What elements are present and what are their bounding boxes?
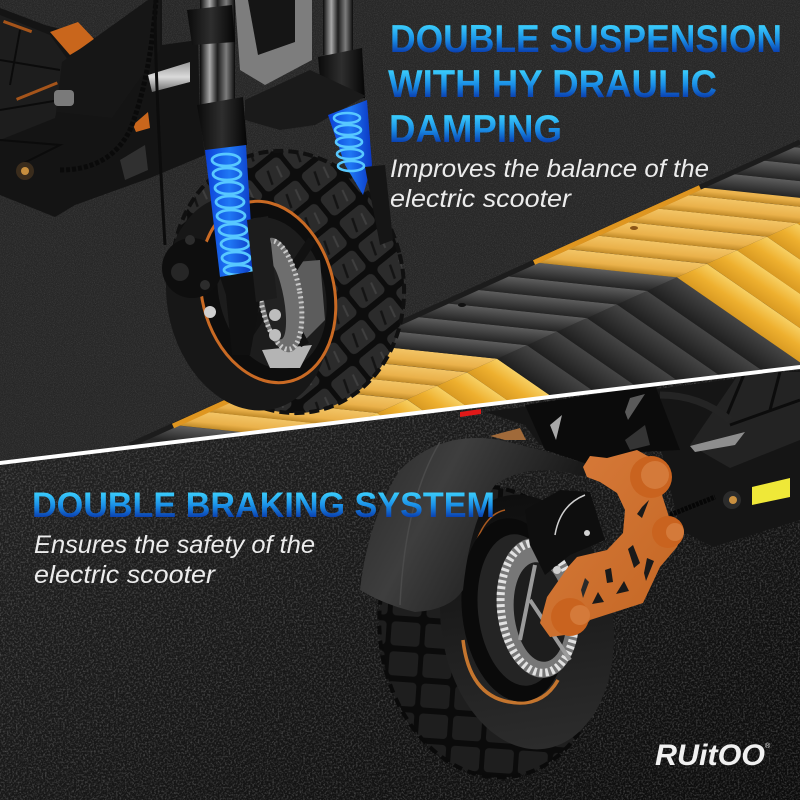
text: braking description: Ensures the safety of the	[34, 531, 315, 559]
heading: double suspension: DAMPING	[389, 108, 562, 151]
heading: double braking: DOUBLE BRAKING SYSTEM	[32, 486, 495, 525]
text: braking description: electric scooter	[34, 561, 217, 589]
rear wheel	[377, 486, 614, 780]
front wheel	[162, 148, 406, 416]
logo: Ruitoo: RUitOO	[655, 739, 765, 772]
asphalt background bottom	[0, 360, 800, 800]
speed bump with chevron stripes	[129, 140, 800, 446]
panel: bottom braking scene	[0, 360, 800, 800]
text: suspension description	[390, 155, 709, 213]
panel: top suspension scene	[0, 0, 800, 460]
rear light	[723, 491, 741, 509]
right blue shock	[328, 100, 372, 195]
asphalt background top	[0, 0, 800, 470]
text: suspension description: electric scooter	[390, 185, 573, 213]
brake caliper	[525, 490, 605, 575]
heading: double suspension	[388, 18, 782, 151]
heading: double suspension: WITH HY DRAULIC	[388, 63, 717, 106]
orange pedal	[50, 22, 95, 55]
left blue shock	[205, 145, 254, 277]
rear deck	[460, 370, 800, 547]
scooter deck, front	[0, 0, 205, 245]
reflector	[752, 478, 790, 505]
diagonal white divider	[0, 365, 800, 465]
orange swing arm	[540, 450, 684, 637]
front suspension forks	[187, 0, 393, 355]
brake disc rear	[496, 538, 578, 678]
rear fender	[360, 428, 590, 612]
brake lever	[660, 395, 730, 420]
text: suspension description: Improves the balance of the	[390, 155, 709, 183]
brake disc front	[259, 238, 304, 352]
logo: Ruitoo: ®	[765, 742, 771, 750]
text: braking description	[34, 531, 315, 589]
